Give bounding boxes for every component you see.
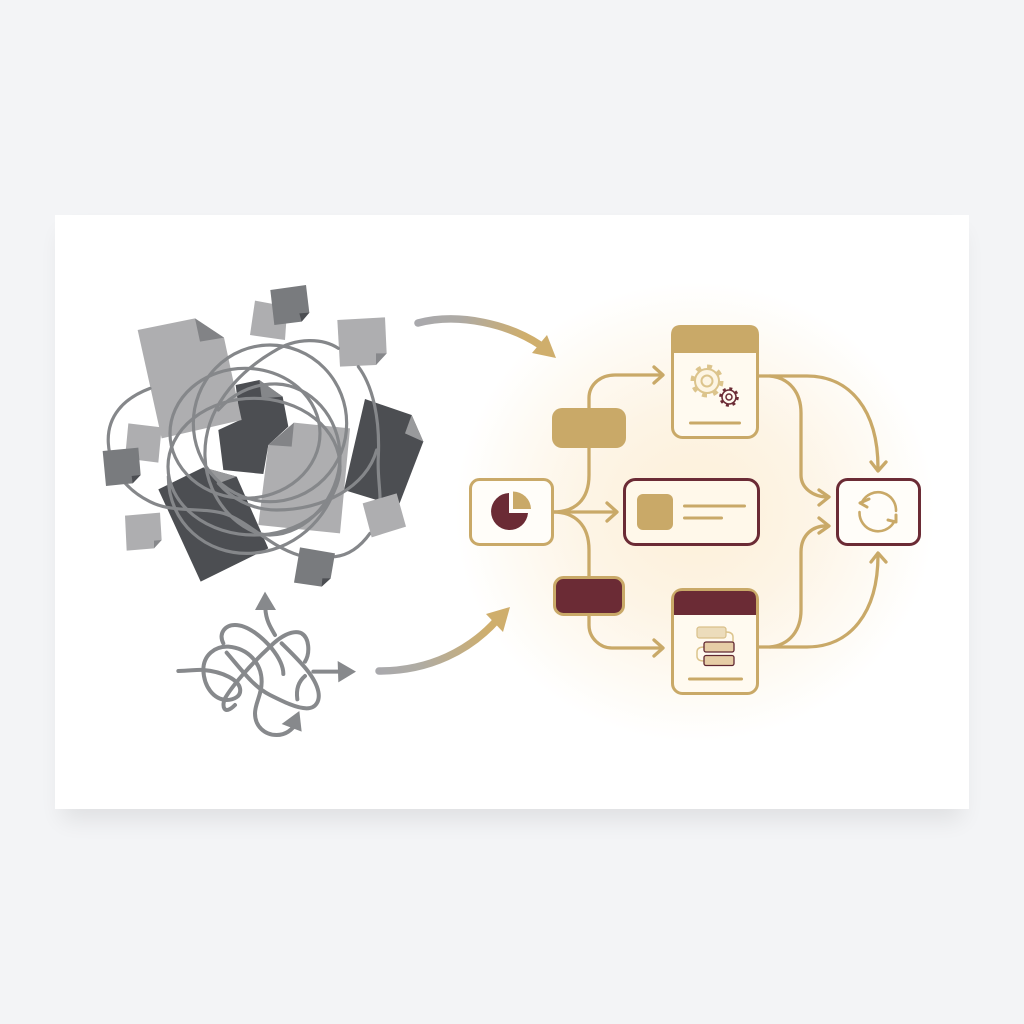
sticky note: top dark	[270, 285, 309, 325]
node: maroon pill	[554, 578, 624, 614]
node: cycle output card	[838, 480, 920, 544]
chaos cluster: scattered documents and tangled wires	[103, 285, 423, 587]
panel shadow	[62, 232, 962, 820]
sticky note: left dark	[103, 448, 141, 486]
icon: refresh arrows	[859, 492, 896, 531]
arrow: chaos to workflow, top	[418, 319, 556, 358]
tangle icon with outgoing arrows	[178, 592, 356, 735]
node: hierarchy card	[672, 590, 758, 694]
icon: pie chart	[491, 492, 531, 530]
background glow behind workflow	[455, 282, 935, 742]
document: large light page	[138, 318, 242, 438]
tangled wires	[108, 341, 380, 557]
knot strands	[178, 608, 340, 735]
sticky note: left light	[125, 423, 162, 463]
document: centre light page	[258, 423, 350, 533]
card line	[689, 422, 741, 424]
arrow: chaos to workflow, bottom	[379, 607, 510, 671]
node: content card	[624, 480, 758, 544]
document: lower left dark page	[158, 467, 268, 582]
mini diagram	[697, 627, 734, 666]
icon: light gear	[692, 366, 722, 396]
document: dark centre page	[218, 380, 288, 474]
thumbnail	[637, 494, 673, 530]
sticky note: bottom dark	[294, 547, 335, 587]
workflow connectors	[553, 367, 886, 656]
icon: dark gear	[720, 388, 738, 406]
node: settings card	[671, 325, 759, 438]
sticky note: top right light	[337, 317, 387, 367]
sticky note: top light	[250, 301, 287, 340]
card header: maroon	[674, 591, 756, 615]
panel: white card	[55, 215, 969, 809]
sticky note: bottom right light	[363, 493, 406, 537]
document: right dark page	[344, 399, 423, 507]
sticky note: bottom left light	[125, 513, 162, 551]
card header: gold	[671, 325, 759, 353]
arrowheads	[255, 592, 356, 732]
node: gold pill	[552, 408, 626, 448]
node: pie chart card	[470, 480, 552, 544]
text lines	[683, 504, 746, 520]
card line	[688, 678, 743, 680]
